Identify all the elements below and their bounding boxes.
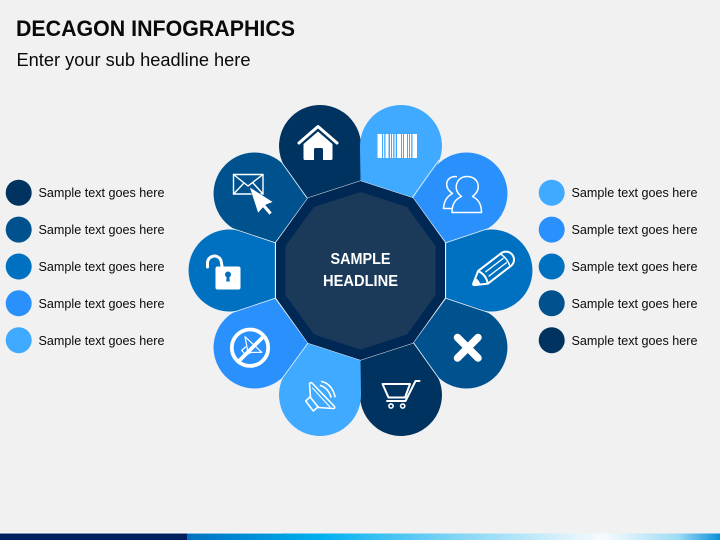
icon: envelope with cursor — [234, 174, 273, 215]
legend item 5 — [6, 327, 165, 353]
legend item 2: Sample text goes here — [38, 223, 165, 237]
icon: speaker — [306, 382, 335, 411]
legend item 3: Sample text goes here — [38, 260, 165, 274]
central decagon — [276, 181, 445, 360]
panel: pencil petal — [446, 230, 532, 312]
legend item 1 — [6, 180, 165, 206]
panel: lock petal — [189, 230, 275, 312]
bottom colour bar — [0, 532, 720, 540]
left legend — [6, 180, 165, 353]
legend item 5: Sample text goes here — [38, 334, 165, 348]
panel: close petal — [406, 288, 524, 405]
panel: muted speaker petal — [197, 288, 315, 405]
icon: cross — [458, 338, 478, 358]
icon: pencil — [468, 248, 517, 291]
legend item 2: Sample text goes here — [572, 223, 698, 237]
icon: open padlock — [208, 256, 240, 290]
center headline: SAMPLE — [330, 251, 390, 268]
legend item 1: Sample text goes here — [572, 186, 698, 200]
icon: house — [299, 126, 337, 160]
icon: two people — [444, 176, 482, 212]
legend item 2 — [6, 217, 165, 243]
panel: speaker petal — [268, 339, 373, 447]
legend item 4 — [539, 290, 698, 316]
legend item 3: Sample text goes here — [572, 260, 698, 274]
legend item 1 — [539, 180, 698, 206]
panel: mail petal — [197, 136, 315, 253]
legend item 2 — [539, 217, 698, 243]
legend item 1: Sample text goes here — [38, 186, 165, 200]
center headline line 2: HEADLINE — [323, 273, 398, 290]
icon: shopping cart — [382, 381, 420, 408]
legend item 4 — [6, 290, 165, 316]
panel: cart petal — [348, 339, 453, 447]
legend item 3 — [539, 254, 698, 280]
icon: prohibited speaker — [232, 330, 268, 366]
panel: users petal — [406, 136, 524, 253]
legend item 3 — [6, 254, 165, 280]
title: DECAGON INFOGRAPHICS — [16, 16, 295, 41]
panel: barcode petal — [348, 94, 453, 202]
panel: home petal — [268, 94, 373, 202]
icon: barcode — [378, 134, 417, 158]
subtitle: Enter your sub headline here — [16, 50, 250, 70]
right legend — [539, 180, 698, 353]
legend item 4: Sample text goes here — [572, 297, 698, 311]
legend item 5 — [539, 327, 698, 353]
legend item 5: Sample text goes here — [572, 334, 698, 348]
legend item 4: Sample text goes here — [38, 297, 165, 311]
